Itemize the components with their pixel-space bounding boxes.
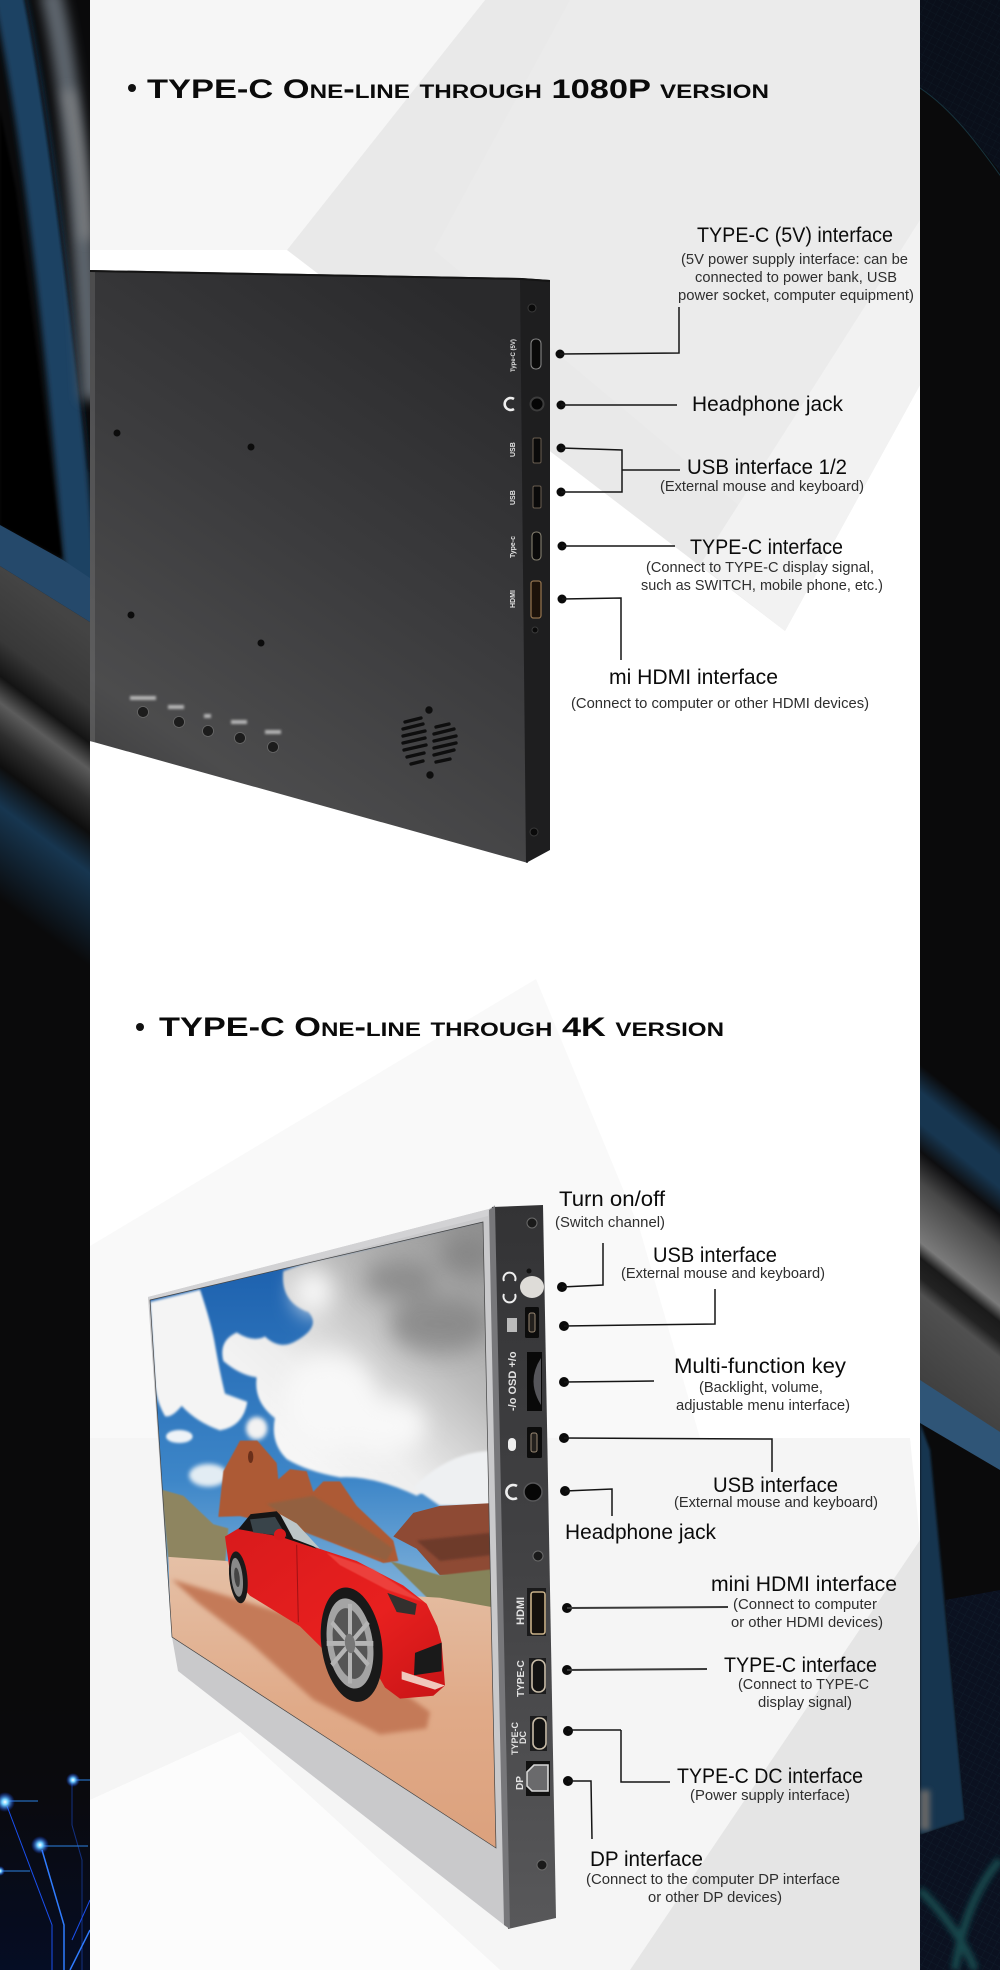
top bezel shade (148, 1209, 489, 1302)
background: lighter right facet (700, 220, 920, 631)
cloud lower (246, 1417, 267, 1440)
far butte (393, 1503, 493, 1575)
left edge highlight (90, 272, 95, 742)
monitor: front view 4K (140, 1205, 556, 1929)
lines (562, 1243, 772, 1839)
label: USB interface 1/2: USB interface 1/2 (687, 455, 847, 479)
label: DP interface: or other DP devices) (648, 1890, 782, 1906)
label: TYPE-C (5V) interface (678, 223, 914, 304)
port: Type-C 5V (531, 339, 541, 369)
label: DP interface: (Connect to the computer DP interface (586, 1872, 840, 1888)
right scrub (390, 1561, 491, 1607)
port: HDMI (531, 581, 541, 618)
port: Type-C DC (530, 1716, 547, 1751)
photo on screen: desert road with red car (140, 1210, 500, 1863)
label: TYPE-C interface (641, 535, 883, 594)
monitor rear face (90, 270, 528, 863)
background: black window (0, 110, 62, 558)
cloud mass right (222, 1218, 493, 1496)
grey lines (567, 1607, 728, 1670)
label: TYPE-C interface: (Connect to TYPE-C display signal, (646, 560, 874, 576)
label: Multi-function key (674, 1354, 850, 1414)
side bar (492, 1205, 556, 1929)
background: lower grid lines (920, 1590, 1000, 1970)
background: sheen gradient field (0, 566, 90, 956)
label: TYPE-C interface: TYPE-C interface (724, 1653, 877, 1677)
mount holes (114, 430, 264, 646)
label: mi HDMI interface: (Connect to computer or other HDMI devices) (571, 696, 869, 712)
side strip (520, 278, 550, 863)
port: USB 1 (533, 438, 541, 463)
dots (556, 350, 566, 604)
background: grey band highlight (68, 90, 86, 240)
port: USB top (525, 1307, 539, 1338)
label: mini HDMI interface (711, 1572, 897, 1631)
ground (168, 1557, 497, 1863)
screws (527, 1218, 547, 1870)
rock hollow (248, 1451, 253, 1463)
background: top navy grid (920, 0, 1000, 178)
port: Type-C (529, 1658, 546, 1694)
car mirror (274, 1529, 286, 1540)
rock shadow (267, 1496, 393, 1561)
background: circuit lines (0, 1780, 90, 1970)
background: blue curved band (8, 0, 82, 590)
heading text: TYPE-C One-line through 4K version (159, 1012, 724, 1042)
car body (225, 1528, 445, 1699)
front wheel (312, 1580, 391, 1709)
panel: left dark background art (0, 0, 92, 1970)
car headlight (387, 1593, 417, 1615)
label: Headphone jack: Headphone jack (565, 1520, 716, 1544)
port labels: -/o OSD +/o (507, 1351, 519, 1411)
speaker grille (403, 708, 456, 777)
label: TYPE-C DC interface (677, 1764, 863, 1804)
background: top light area (90, 0, 485, 250)
leader lines: 1080P callouts (556, 307, 680, 660)
port labels: Type-c (510, 536, 517, 558)
leader lines: 4K callouts (557, 1243, 772, 1839)
label: USB interface top: (External mouse and keyboard) (621, 1266, 825, 1282)
panel: right dark background art (920, 0, 1000, 1970)
rear wheel (226, 1550, 250, 1605)
label: mi HDMI interface (571, 665, 869, 712)
background: blue sill (920, 1380, 1000, 1470)
cloud wisp low (189, 1464, 228, 1487)
monitor: rear view 1080P (90, 270, 550, 863)
label: USB interface top: USB interface (653, 1243, 777, 1267)
port: headphone jack (524, 1483, 542, 1501)
port: USB lower (527, 1427, 542, 1458)
butte band (417, 1532, 493, 1561)
top rim (90, 270, 550, 282)
label: TYPE-C (5V) interface: TYPE-C (5V) interface (697, 223, 893, 247)
car door line (297, 1545, 298, 1622)
label: Multi-function key: adjustable menu interface) (676, 1398, 850, 1414)
lines (560, 307, 680, 660)
label: USB interface lower (674, 1473, 878, 1511)
background: dark seam (24, 0, 90, 470)
background: sheen gradient field (920, 1068, 1000, 1432)
background: navy base of circuit (0, 1835, 90, 1970)
port: HDMI (527, 1588, 546, 1636)
label: mini HDMI interface: or other HDMI devices) (731, 1615, 883, 1631)
car shadow (172, 1579, 430, 1734)
port labels: HDMI (515, 1597, 527, 1625)
car bumper lip (402, 1671, 445, 1690)
background: lower grey field (90, 1438, 920, 1970)
label: Turn on/off: Turn on/off (559, 1187, 665, 1211)
car grille (414, 1643, 442, 1675)
heading: 1080P version (128, 74, 769, 104)
background: teal edge (920, 88, 1000, 178)
left scrub (162, 1490, 228, 1565)
label: TYPE-C interface (724, 1653, 877, 1711)
port labels: USB (510, 442, 517, 457)
label: TYPE-C interface: TYPE-C interface (690, 535, 843, 559)
car windscreen (280, 1514, 320, 1549)
port labels: TYPE-C (510, 1721, 520, 1755)
label: TYPE-C (5V) interface: power socket, computer equipment) (678, 288, 914, 304)
port labels: DP (515, 1776, 526, 1790)
background: teal sweep (920, 1860, 1000, 1970)
screws (528, 304, 538, 836)
label: USB interface 1/2 (660, 455, 864, 495)
background: top grid lines (920, 0, 1000, 178)
cloud wisp (166, 1430, 193, 1443)
port labels: USB (510, 490, 517, 505)
port: DP (526, 1761, 550, 1796)
label: USB interface lower: USB interface (713, 1473, 838, 1497)
label: USB interface top (621, 1243, 825, 1282)
label: TYPE-C (5V) interface: connected to power bank, USB (695, 270, 897, 286)
label: TYPE-C interface: such as SWITCH, mobile phone, etc.) (641, 578, 883, 594)
dots (557, 1282, 573, 1786)
heading text: TYPE-C One-line through 1080P version (147, 74, 769, 104)
label: mini HDMI interface: mini HDMI interface (711, 1572, 897, 1596)
port labels (504, 1273, 528, 1790)
label: mi HDMI interface: mi HDMI interface (609, 665, 778, 689)
screen hairline (150, 1222, 496, 1848)
port labels: Type-C (5V) (511, 339, 517, 372)
label: Turn on/off (555, 1187, 665, 1231)
background: grey curved band (50, 0, 92, 400)
label: TYPE-C DC interface: (Power supply interface) (690, 1788, 850, 1804)
label: TYPE-C interface: display signal) (758, 1695, 852, 1711)
cloud dark patches (363, 1234, 493, 1353)
car side window (250, 1517, 287, 1537)
car roof (238, 1511, 317, 1549)
power button (520, 1268, 544, 1298)
multi-function wheel (527, 1352, 542, 1411)
heading: 4K version (136, 1012, 724, 1042)
label: TYPE-C (5V) interface: (5V power supply interface: can be (681, 252, 908, 268)
label: DP interface: DP interface (590, 1847, 703, 1871)
background: blue sill (0, 525, 90, 622)
label: TYPE-C DC interface: TYPE-C DC interface (677, 1764, 863, 1788)
port labels: HDMI (510, 590, 517, 608)
bullet (136, 1023, 144, 1031)
label: USB interface lower: (External mouse and keyboard) (674, 1495, 878, 1511)
label: TYPE-C interface: (Connect to TYPE-C (738, 1677, 869, 1693)
label: mini HDMI interface: (Connect to computer (733, 1597, 877, 1613)
background: lower navy (920, 1590, 1000, 1970)
label: Multi-function key: (Backlight, volume, (699, 1380, 823, 1396)
background: lower triangle (90, 979, 700, 1438)
main rock (218, 1441, 398, 1563)
car hood highlight (327, 1553, 423, 1602)
background: lower white field (90, 1732, 500, 1970)
label: Multi-function key: Multi-function key (674, 1354, 846, 1378)
background: lighter band (434, 0, 920, 540)
port labels: DC (518, 1731, 528, 1744)
port: USB 2 (533, 486, 541, 508)
background: grey glint (920, 1790, 930, 1830)
silver bezel (148, 1205, 508, 1928)
cloud left (150, 1290, 247, 1430)
label: Turn on/off: (Switch channel) (555, 1215, 665, 1231)
control buttons (130, 696, 281, 752)
background: blue vertical wedge (920, 1423, 965, 1835)
port labels: TYPE-C (516, 1660, 527, 1697)
port labels (505, 339, 517, 608)
cloud bank at horizon (420, 1450, 488, 1506)
background: large grey polygon (287, 0, 920, 631)
side bar inner edge (489, 1206, 510, 1929)
port: Type-C (532, 532, 541, 560)
port: headphone jack (530, 398, 544, 410)
sky (150, 1222, 482, 1607)
label: DP interface (586, 1847, 840, 1906)
bullet (128, 84, 136, 92)
label: USB interface 1/2: (External mouse and keyboard) (660, 479, 864, 495)
label: Headphone jack: Headphone jack (692, 392, 843, 416)
background: circuit glow nodes (0, 1773, 80, 1876)
background: lower right grey (630, 1540, 920, 1970)
cloud bright patches (283, 1271, 427, 1455)
